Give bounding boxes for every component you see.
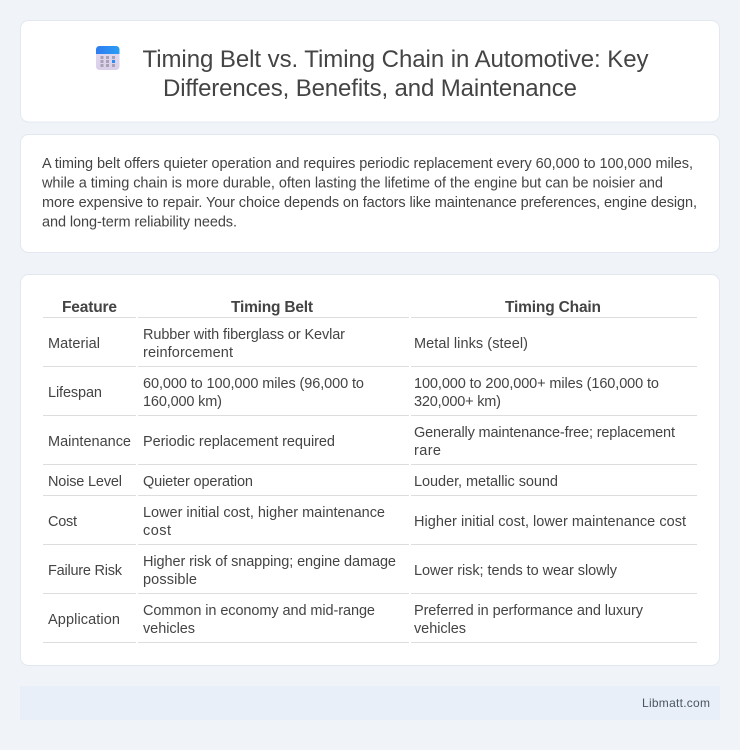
- row: material: Metal links (steel): [414, 336, 528, 352]
- row: maintenance: [48, 425, 675, 459]
- table header: [62, 299, 601, 316]
- panel: summary text: A timing belt offers quieter operation and requires periodic replacement every 60,000 to 100,000 miles,: [42, 156, 693, 172]
- footer: Libmatt.com: [642, 696, 710, 710]
- row: failure risk: Failure Risk: [48, 563, 123, 579]
- row: maintenance: Maintenance: [48, 434, 131, 450]
- row: application: Preferred in performance and luxury: [414, 603, 644, 619]
- row: failure risk: Higher risk of snapping; engine damage: [143, 554, 396, 570]
- row: failure risk: [48, 554, 618, 588]
- panel: summary text: [20, 134, 720, 252]
- row: noise level: Louder, metallic sound: [414, 474, 558, 490]
- panel: summary text: and long-term reliability needs.: [42, 214, 237, 230]
- row: lifespan: 320,000+ km): [414, 394, 501, 410]
- icon: calendar: [96, 46, 120, 70]
- row: cost: Lower initial cost, higher maintenance: [143, 505, 385, 521]
- row: maintenance: Generally maintenance-free; replacement: [414, 425, 675, 441]
- panel: summary text: while a timing chain is more durable, often lasting the lifetime of the engine but can be noisier and: [41, 176, 663, 192]
- row: noise level: [48, 474, 558, 490]
- row: cost: cost: [143, 523, 171, 539]
- row: lifespan: 60,000 to 100,000 miles (96,000 to: [143, 376, 364, 392]
- row: lifespan: [48, 376, 659, 410]
- row: cost: Higher initial cost, lower maintenance cost: [414, 514, 686, 530]
- title: Differences, Benefits, and Maintenance: [163, 75, 577, 102]
- row: cost: [48, 505, 686, 539]
- row: application: [48, 603, 644, 637]
- panel: summary text: more expensive to repair. Your choice depends on factors like maintenance preferences, engine design,: [42, 195, 697, 211]
- row: maintenance: Periodic replacement required: [143, 434, 335, 450]
- table header: Feature: [62, 299, 117, 316]
- row: lifespan: Lifespan: [48, 385, 102, 401]
- row: application: vehicles: [414, 621, 466, 637]
- footer: [20, 686, 720, 720]
- row: material: Rubber with fiberglass or Kevlar: [143, 327, 345, 343]
- row: noise level: Quieter operation: [143, 474, 253, 490]
- row: failure risk: Lower risk; tends to wear slowly: [414, 563, 618, 579]
- title: Timing Belt vs. Timing Chain in Automotive: Key: [142, 46, 648, 73]
- table header: Timing Belt: [231, 299, 313, 316]
- panel: header: [20, 20, 720, 122]
- row: failure risk: possible: [143, 572, 197, 588]
- row: application: Application: [48, 612, 120, 628]
- row: lifespan: 100,000 to 200,000+ miles (160,000 to: [414, 376, 659, 392]
- row: noise level: Noise Level: [48, 474, 122, 490]
- row: application: vehicles: [143, 621, 195, 637]
- panel: comparison table: [20, 274, 720, 666]
- row: lifespan: 160,000 km): [143, 394, 222, 410]
- row: material: reinforcement: [143, 345, 233, 361]
- title: [142, 46, 648, 102]
- row: material: Material: [48, 336, 100, 352]
- row: application: Common in economy and mid-range: [143, 603, 375, 619]
- row: maintenance: rare: [414, 443, 441, 459]
- table row lines: [43, 318, 697, 642]
- row: material: [48, 327, 528, 361]
- table header: Timing Chain: [505, 299, 601, 316]
- row: cost: Cost: [48, 514, 77, 530]
